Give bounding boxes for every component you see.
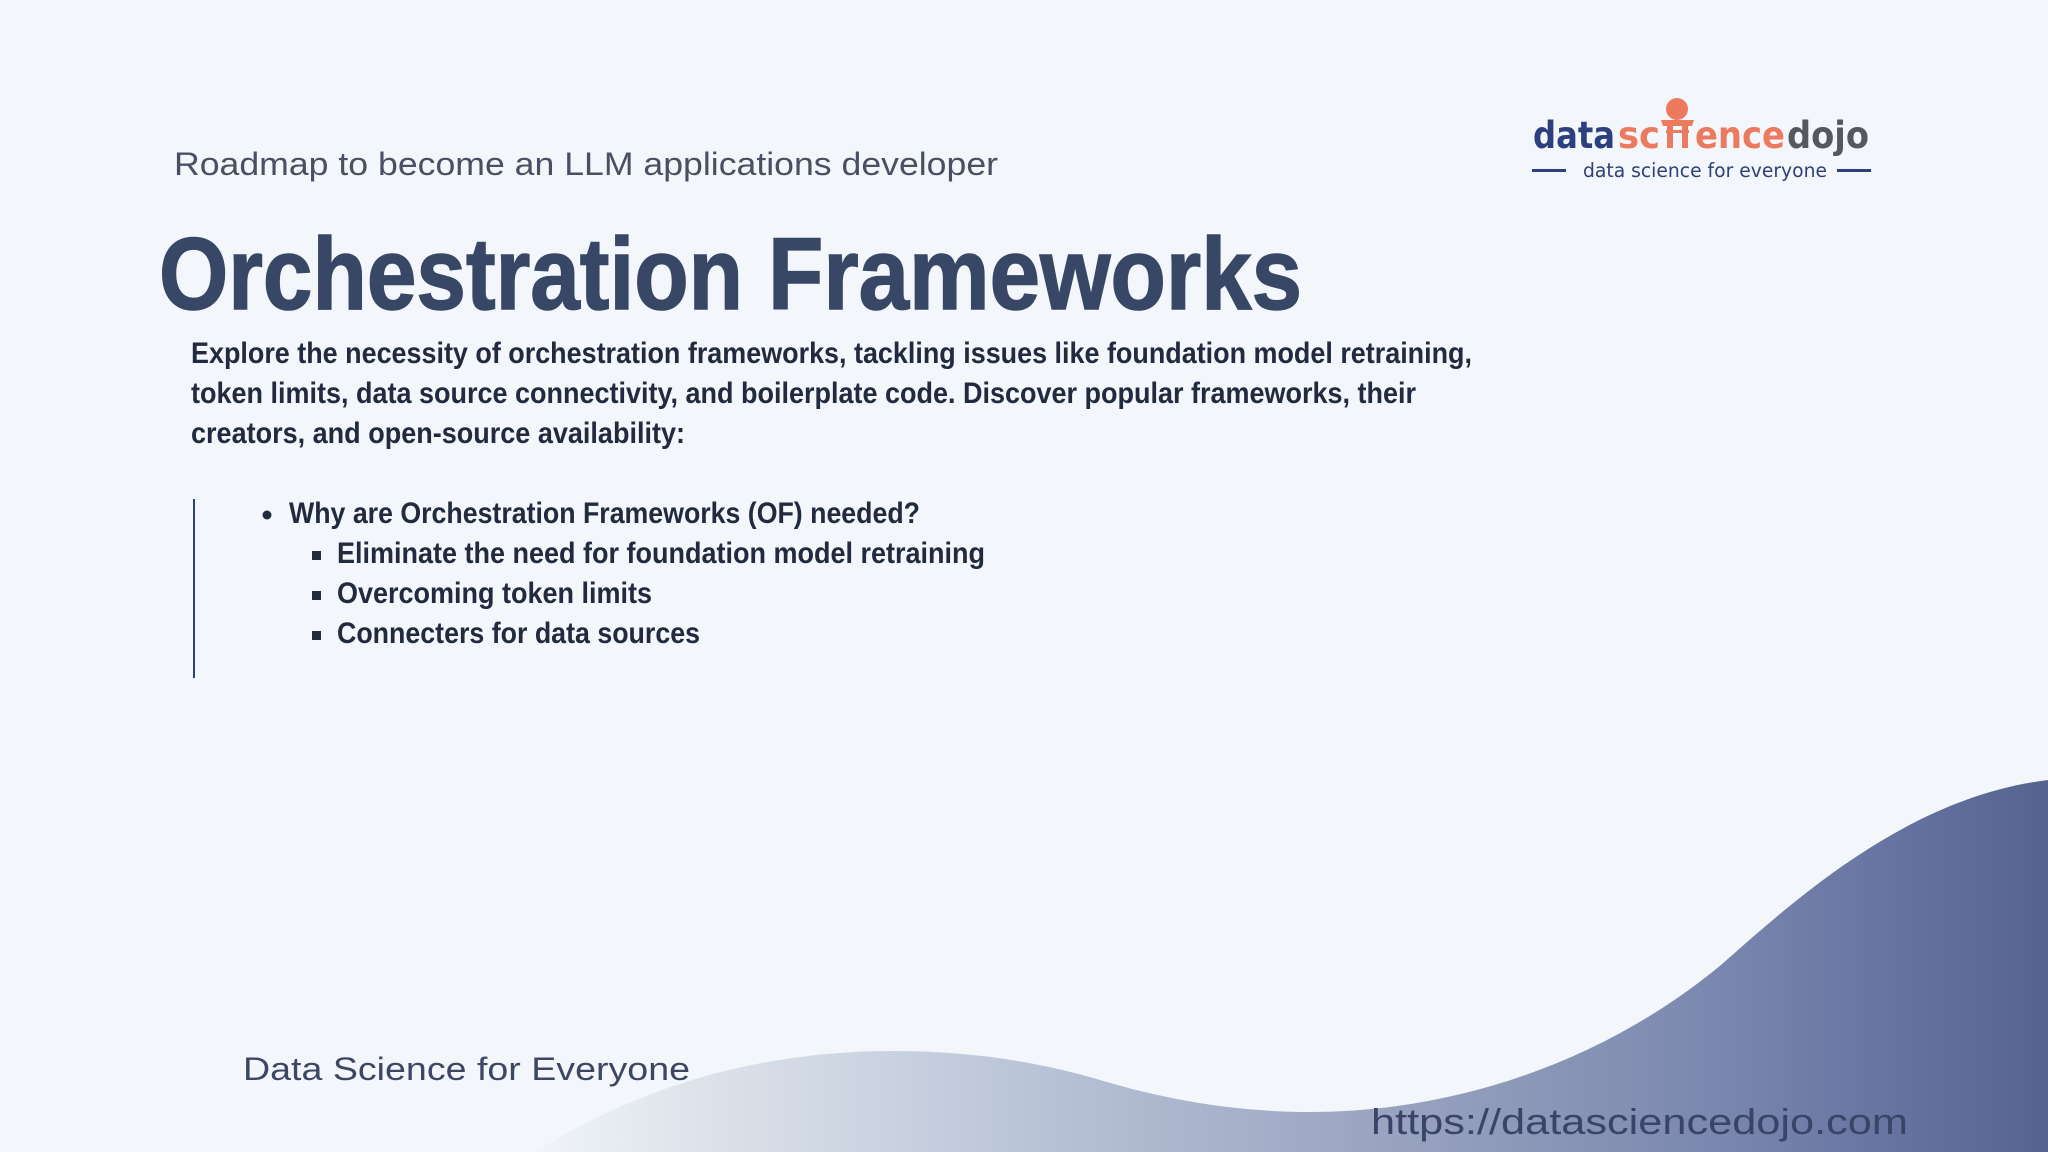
logo: data science dojo <box>1532 98 1871 182</box>
icon: torii gate with sun <box>1661 98 1694 148</box>
quote rule <box>193 499 195 678</box>
logo: data science dojo: dojo <box>1787 114 1869 157</box>
bullet: connecters: Connecters for data sources <box>337 617 700 650</box>
bullet: retraining: Eliminate the need for foundation model retraining <box>337 537 985 570</box>
footer tagline: Data Science for Everyone <box>243 1051 690 1087</box>
intro paragraph: Explore the necessity of orchestration frameworks, tackling issues like foundation model retraining, <box>191 337 1472 370</box>
bullet list <box>262 497 985 650</box>
logo: data science dojo: data <box>1533 114 1615 157</box>
intro paragraph: creators, and open-source availability: <box>191 417 685 450</box>
decorative wave <box>530 780 2048 1152</box>
logo: data science dojo: ence <box>1695 114 1785 157</box>
bullet: token limits: Overcoming token limits <box>337 577 652 610</box>
logo tagline: data science for everyone <box>1583 159 1827 182</box>
title <box>159 217 1302 331</box>
intro paragraph <box>191 337 1472 450</box>
footer url: https://datasciencedojo.com <box>1371 1101 1908 1142</box>
title: Frameworks <box>768 217 1302 331</box>
subtitle: Roadmap to become an LLM applications developer <box>174 146 998 182</box>
title: Orchestration <box>159 217 743 331</box>
logo: data science dojo: sc <box>1618 114 1660 157</box>
intro paragraph: token limits, data source connectivity, and boilerplate code. Discover popular frameworks, their <box>191 377 1416 410</box>
bullet: main question: Why are Orchestration Frameworks (OF) needed? <box>289 497 920 530</box>
